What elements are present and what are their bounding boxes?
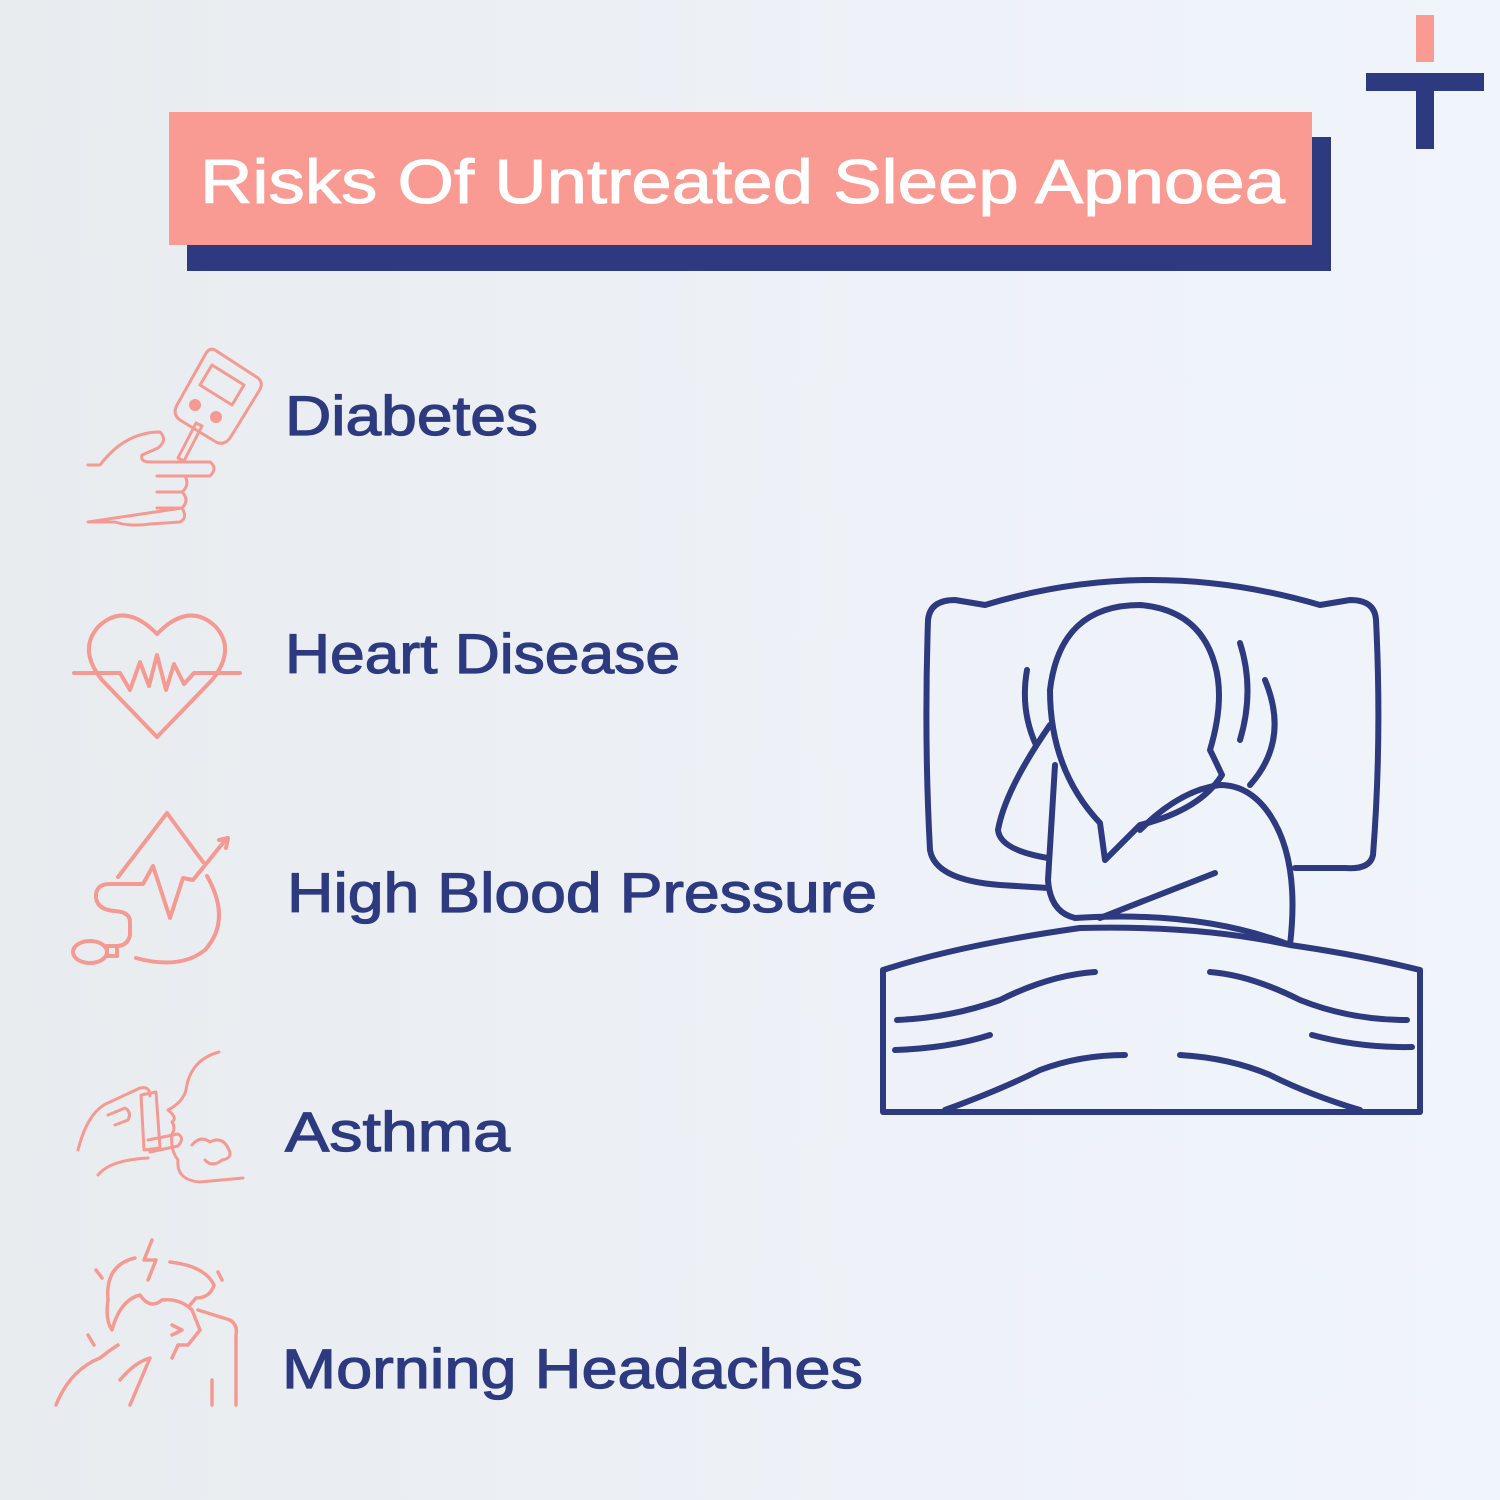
icon: blood pressure — [73, 813, 228, 963]
label: Morning Headaches: Morning Headaches — [282, 1337, 863, 1400]
label: Diabetes: Diabetes — [285, 384, 538, 447]
logo: plus mark — [1366, 15, 1484, 149]
icon: glucose meter — [88, 349, 261, 525]
icon: heart with pulse — [74, 616, 240, 737]
label: Asthma: Asthma — [285, 1100, 511, 1163]
icon: asthma inhaler — [78, 1052, 243, 1182]
icon: headache — [56, 1240, 236, 1405]
title banner — [169, 112, 1331, 271]
label: High Blood Pressure: High Blood Pressure — [287, 861, 877, 924]
title banner: Risks Of Untreated Sleep Apnoea — [200, 148, 1286, 217]
label: Heart Disease: Heart Disease — [285, 622, 680, 685]
illustration: person sleeping in bed — [883, 580, 1420, 1112]
